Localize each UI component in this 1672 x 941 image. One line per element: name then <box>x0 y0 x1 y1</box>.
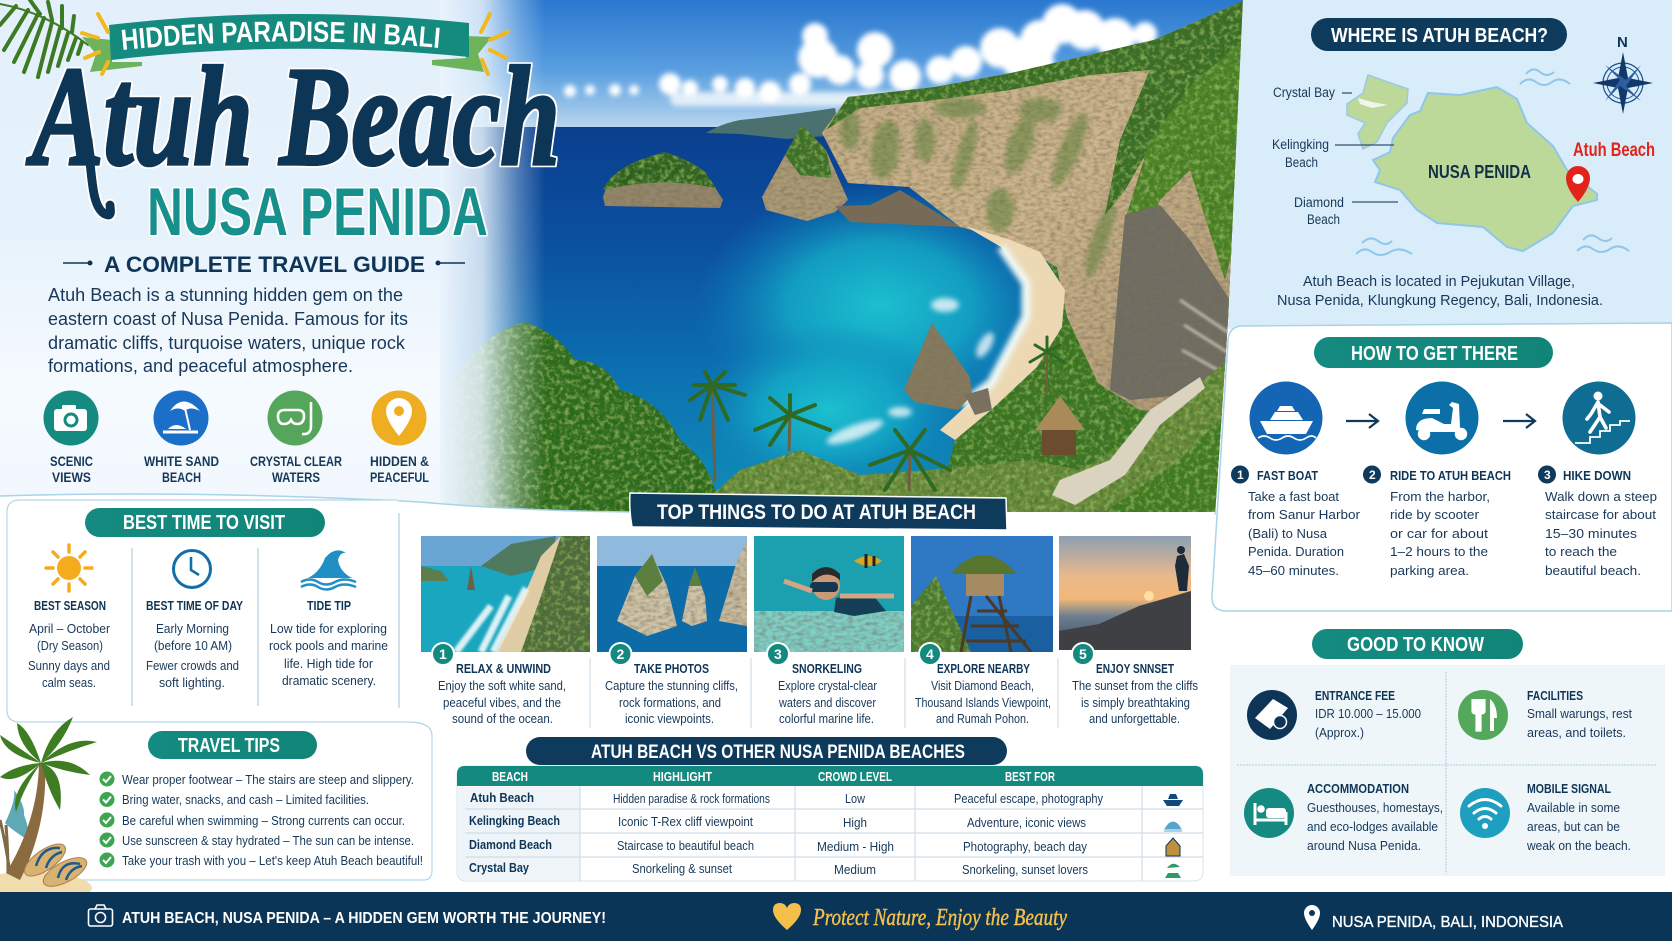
row: Diamond Beach: Medium - High <box>817 840 894 854</box>
step 1: 45–60 minutes. <box>1248 563 1339 578</box>
step 2: ride by scooter <box>1390 507 1480 522</box>
icon: camera <box>44 390 98 446</box>
activity 2 text <box>605 662 738 726</box>
feature labels: VIEWS <box>52 470 91 485</box>
hidden paradise ribbon <box>80 12 510 76</box>
clouds <box>564 4 1157 106</box>
activity 5 text: The sunset from the cliffs <box>1072 679 1198 693</box>
step 3: to reach the <box>1545 544 1617 559</box>
waves <box>1356 238 1412 255</box>
beach hut <box>1035 396 1085 430</box>
activity 5 text: and unforgettable. <box>1089 712 1180 726</box>
waves <box>1520 69 1570 85</box>
table header: HIGHLIGHT <box>653 770 712 784</box>
step 2: 1–2 hours to the <box>1390 544 1488 559</box>
tips list: Use sunscreen & stay hydrated – The sun can be intense. <box>122 834 414 848</box>
icon: wave <box>301 550 356 590</box>
step 2: parking area. <box>1390 563 1469 578</box>
entrance fee: (Approx.) <box>1315 725 1364 740</box>
feature labels: SCENIC <box>50 454 93 469</box>
heading pill <box>1311 18 1567 51</box>
intro paragraph: formations, and peaceful atmosphere. <box>48 355 353 376</box>
mobile signal: MOBILE SIGNAL <box>1527 781 1611 796</box>
map labels: Crystal Bay <box>1273 85 1335 100</box>
icon: red pin <box>1566 166 1590 202</box>
step 1: Take a fast boat <box>1248 489 1339 504</box>
checkmarks <box>100 772 114 868</box>
step 2: or car for about <box>1390 526 1488 541</box>
left fade overlay <box>440 0 545 510</box>
palm frond top left <box>0 0 88 77</box>
activity 4 text: EXPLORE NEARBY <box>937 662 1031 676</box>
arrow <box>1503 414 1535 428</box>
mobile signal <box>1526 781 1631 853</box>
feature labels: BEACH <box>162 470 201 485</box>
footer left text: ATUH BEACH, NUSA PENIDA – A HIDDEN GEM WORTH THE JOURNEY! <box>122 910 606 927</box>
tips list: Bring water, snacks, and cash – Limited facilities. <box>122 793 369 807</box>
hidden paradise ribbon: HIDDEN PARADISE IN BALI <box>122 22 440 50</box>
entrance fee <box>1315 688 1421 740</box>
foreground trees <box>440 322 720 515</box>
tips list: Be careful when swimming – Strong currents can occur. <box>122 814 405 828</box>
number badges: 1 <box>439 646 447 662</box>
map label: Nusa Penida: NUSA PENIDA <box>1428 162 1531 182</box>
icon: ticket <box>1247 690 1297 740</box>
number badges: 2 <box>616 646 624 662</box>
step 1: Penida. Duration <box>1248 544 1344 559</box>
footer slogan: Protect Nature, Enjoy the Beauty <box>812 905 1067 931</box>
row: Diamond Beach <box>469 838 1088 854</box>
step 3 <box>1538 466 1657 578</box>
feature labels: PEACEFUL <box>370 470 429 485</box>
main cliff <box>822 0 1250 420</box>
icon: camera outline <box>88 905 112 926</box>
location text <box>1277 274 1603 309</box>
panel: best time to visit <box>7 500 408 722</box>
time of day column: soft lighting. <box>159 676 225 690</box>
heading: comparison: ATUH BEACH VS OTHER NUSA PENIDA BEACHES <box>591 742 965 763</box>
icon: scooter <box>1406 382 1478 454</box>
icon: location pin <box>372 390 426 446</box>
heading pill <box>1314 337 1553 368</box>
title: Atuh Beach <box>26 37 560 215</box>
intro paragraph: dramatic cliffs, turquoise waters, unique rock <box>48 332 406 353</box>
compass <box>1593 34 1653 114</box>
icon: fork and knife <box>1458 690 1508 740</box>
heading: top things to do <box>630 493 1007 530</box>
row: Crystal Bay: Snorkeling & sunset <box>632 862 732 876</box>
dark strata <box>1110 205 1235 400</box>
heading pill: GOOD TO KNOW <box>1347 634 1484 656</box>
mobile signal: Available in some <box>1527 800 1620 815</box>
step 1: 1 <box>1237 468 1244 482</box>
map: white beach patch <box>1358 98 1388 108</box>
activity 1 text: sound of the ocean. <box>452 712 553 726</box>
season column: April – October <box>29 622 110 636</box>
rock islet <box>603 152 723 208</box>
activity 4 text: Visit Diamond Beach, <box>931 679 1034 693</box>
feature labels <box>50 454 429 485</box>
step 2: RIDE TO ATUH BEACH <box>1390 468 1511 483</box>
step 3: staircase for about <box>1545 507 1656 522</box>
table header: BEST FOR <box>1005 770 1055 784</box>
icon: footer pin <box>1304 905 1320 930</box>
activity 2 text: iconic viewpoints. <box>625 712 714 726</box>
photo: snorkeling <box>754 536 904 652</box>
tips list <box>122 773 423 868</box>
row: Kelingking Beach: Kelingking Beach <box>469 814 560 828</box>
right shore vegetation <box>948 241 1232 514</box>
number badges: 3 <box>774 646 782 662</box>
panel: travel tips <box>60 722 432 880</box>
table header: BEACH <box>492 770 528 784</box>
activity 4 text <box>915 662 1051 726</box>
tips list: Wear proper footwear – The stairs are steep and slippery. <box>122 773 414 787</box>
map labels: Diamond <box>1294 195 1344 210</box>
step 1: FAST BOAT <box>1257 468 1318 483</box>
waves <box>1577 235 1629 252</box>
icon: heart <box>773 903 801 930</box>
entrance fee: IDR 10.000 – 15.000 <box>1315 706 1421 721</box>
heading pill: BEST TIME TO VISIT <box>123 512 285 534</box>
footer right text: NUSA PENIDA, BALI, INDONESIA <box>1332 914 1563 931</box>
mobile signal: weak on the beach. <box>1526 838 1631 853</box>
activity column dividers <box>590 658 1058 728</box>
heading: top things to do: TOP THINGS TO DO AT ATUH BEACH <box>657 501 976 524</box>
time of day column: Fewer crowds and <box>146 659 239 673</box>
accommodation: around Nusa Penida. <box>1307 838 1421 853</box>
step 2: From the harbor, <box>1390 489 1490 504</box>
heading pill: HOW TO GET THERE <box>1351 343 1518 365</box>
icon: boat <box>1250 382 1322 454</box>
row: Crystal Bay: Crystal Bay <box>469 861 529 875</box>
facilities: areas, and toilets. <box>1527 725 1626 740</box>
activity 2 text: rock formations, and <box>619 696 721 710</box>
right lower background <box>1208 605 1672 895</box>
panel: white lower area <box>0 494 1215 941</box>
heading pill <box>1312 629 1523 659</box>
feature labels: HIDDEN & <box>370 454 429 469</box>
intro paragraph <box>48 284 408 376</box>
step 3: beautiful beach. <box>1545 563 1641 578</box>
number badges: 4 <box>926 646 934 662</box>
row: Crystal Bay: Medium <box>834 863 876 877</box>
season column: BEST SEASON <box>34 599 106 613</box>
row: Kelingking Beach: High <box>843 816 867 830</box>
location text: Nusa Penida, Klungkung Regency, Bali, Indonesia. <box>1277 293 1603 309</box>
step 1 <box>1231 466 1361 578</box>
rock stack <box>762 125 848 221</box>
icon: clock <box>174 550 210 588</box>
hero photo: cliffs and turquoise bay <box>440 0 1250 520</box>
activity 1 text: Enjoy the soft white sand, <box>438 679 566 693</box>
photo: take photos <box>597 536 747 652</box>
intro paragraph: Atuh Beach is a stunning hidden gem on the <box>48 284 403 305</box>
subtitle: A COMPLETE TRAVEL GUIDE <box>104 252 425 277</box>
distant headland <box>706 108 840 139</box>
left column background <box>0 0 470 510</box>
tide tip column <box>269 599 388 688</box>
surf foam <box>824 298 997 449</box>
photo: relax and unwind <box>421 536 590 652</box>
row: Kelingking Beach: Adventure, iconic views <box>967 816 1086 830</box>
row: Kelingking Beach: Iconic T-Rex cliff viewpoint <box>618 815 753 829</box>
activity 4 text: and Rumah Pohon. <box>936 712 1029 726</box>
flip flops <box>20 838 91 892</box>
mobile signal: areas, but can be <box>1527 819 1620 834</box>
icon: wifi <box>1460 788 1510 838</box>
facilities: FACILITIES <box>1527 688 1583 703</box>
entrance fee: ENTRANCE FEE <box>1315 688 1395 703</box>
panel: map background <box>1228 0 1672 329</box>
map labels: Beach <box>1307 212 1340 227</box>
activity 2 text: TAKE PHOTOS <box>634 662 709 676</box>
icon: sun <box>46 545 92 591</box>
accommodation: ACCOMMODATION <box>1307 781 1409 796</box>
activity 3 text: SNORKELING <box>792 662 862 676</box>
icon: hiker on stairs <box>1562 382 1636 454</box>
table header: CROWD LEVEL <box>818 770 892 784</box>
row: Diamond Beach: Photography, beach day <box>963 840 1088 854</box>
accommodation: and eco-lodges available <box>1307 819 1438 834</box>
activity 1 text <box>438 662 566 726</box>
step 2: 2 <box>1369 468 1376 482</box>
feature labels: WATERS <box>272 470 320 485</box>
heading pill <box>85 508 325 537</box>
table row icons <box>1163 794 1183 878</box>
location text: Atuh Beach is located in Pejukutan Village, <box>1303 274 1575 290</box>
icon: bed <box>1244 788 1294 838</box>
activity 3 text <box>778 662 877 726</box>
table header <box>492 770 1055 784</box>
season column: Sunny days and <box>28 659 110 673</box>
row: Atuh Beach: Hidden paradise & rock formations <box>613 792 770 806</box>
icon: snorkel mask <box>268 390 322 446</box>
icon: beach umbrella <box>154 390 208 446</box>
panel: how to get there <box>1212 323 1672 611</box>
stairs <box>1052 377 1205 505</box>
row: Atuh Beach: Low <box>845 792 866 806</box>
season column <box>28 599 110 690</box>
tide tip column: life. High tide for <box>284 657 373 671</box>
step 3: Walk down a steep <box>1545 489 1657 504</box>
map: main island <box>1373 87 1597 251</box>
accommodation: Guesthouses, homestays, <box>1307 800 1443 815</box>
season column: (Dry Season) <box>37 639 103 653</box>
cliff top vegetation <box>826 0 1245 215</box>
feature labels: CRYSTAL CLEAR <box>250 454 342 469</box>
time of day column: BEST TIME OF DAY <box>146 599 244 613</box>
title: Nusa Penida: NUSA PENIDA <box>147 174 488 250</box>
time of day column <box>146 599 244 690</box>
activity 3 text: waters and discover <box>778 696 876 710</box>
palm trees <box>690 337 1064 490</box>
time of day column: (before 10 AM) <box>154 639 232 653</box>
tide tip column: Low tide for exploring <box>270 622 387 636</box>
row: Atuh Beach: Peaceful escape, photography <box>954 792 1104 806</box>
activity 5 text <box>1072 662 1198 726</box>
activity 5 text: ENJOY SNNSET <box>1096 662 1174 676</box>
row: Kelingking Beach <box>469 814 1086 830</box>
season column: calm seas. <box>42 676 96 690</box>
map labels: Beach <box>1285 155 1318 170</box>
accommodation <box>1307 781 1443 853</box>
activity 1 text: peaceful vibes, and the <box>443 696 561 710</box>
feature labels: WHITE SAND <box>144 454 219 469</box>
facilities: Small warungs, rest <box>1527 706 1632 721</box>
map: small island <box>1347 75 1408 149</box>
row: Diamond Beach: Diamond Beach <box>469 838 552 852</box>
number badges: 5 <box>1079 646 1087 662</box>
step 3: 15–30 minutes <box>1545 526 1638 541</box>
heading pill <box>148 731 317 759</box>
panel border line <box>0 494 630 512</box>
row: Crystal Bay <box>469 861 1088 877</box>
activity 3 text: Explore crystal-clear <box>778 679 877 693</box>
activity 3 text: colorful marine life. <box>779 712 874 726</box>
sea rock near shore <box>904 323 972 410</box>
photo: enjoy sunset <box>1059 536 1191 650</box>
cliff vegetation patches <box>840 98 1120 281</box>
row: Atuh Beach <box>470 791 1104 806</box>
step 3: 3 <box>1544 468 1551 482</box>
time of day column: Early Morning <box>156 622 229 636</box>
row: Crystal Bay: Snorkeling, sunset lovers <box>962 863 1088 877</box>
heading pill: TRAVEL TIPS <box>178 735 280 757</box>
step 1: (Bali) to Nusa <box>1248 526 1328 541</box>
compass: N <box>1617 34 1628 51</box>
tide tip column: dramatic scenery. <box>282 674 376 688</box>
activity 4 text: Thousand Islands Viewpoint, <box>915 696 1051 710</box>
arrow <box>1346 414 1378 428</box>
step 3: HIKE DOWN <box>1563 468 1631 483</box>
title: Atuh Beach: Atuh Beach <box>26 37 560 195</box>
activity 1 text: RELAX & UNWIND <box>456 662 551 676</box>
heading pill: WHERE IS ATUH BEACH? <box>1331 25 1548 47</box>
step 1: from Sanur Harbor <box>1248 507 1361 522</box>
tide tip column: TIDE TIP <box>307 599 351 613</box>
comparison table <box>457 766 1203 881</box>
step 2 <box>1363 466 1511 578</box>
illustration: palm and flip flops <box>0 717 97 904</box>
panel: good to know <box>1230 629 1665 876</box>
feature icons <box>44 390 426 446</box>
row: Atuh Beach: Atuh Beach <box>470 791 534 805</box>
facilities <box>1527 688 1632 740</box>
map labels: Kelingking <box>1272 137 1329 152</box>
activity 2 text: Capture the stunning cliffs, <box>605 679 738 693</box>
activity 5 text: is simply breathtaking <box>1081 696 1190 710</box>
number badges <box>432 643 1094 665</box>
intro paragraph: eastern coast of Nusa Penida. Famous for its <box>48 308 408 329</box>
footer bar <box>0 892 1672 941</box>
map labels <box>1272 85 1398 227</box>
tips list: Take your trash with you – Let's keep Atuh Beach beautiful! <box>122 854 423 868</box>
photo: explore nearby <box>911 536 1053 652</box>
beach sand <box>940 226 1065 440</box>
heading: comparison <box>526 737 1007 765</box>
tide tip column: rock pools and marine <box>269 639 388 653</box>
panel: where is Atuh Beach <box>1272 18 1655 309</box>
row: Diamond Beach: Staircase to beautiful beach <box>617 839 754 853</box>
